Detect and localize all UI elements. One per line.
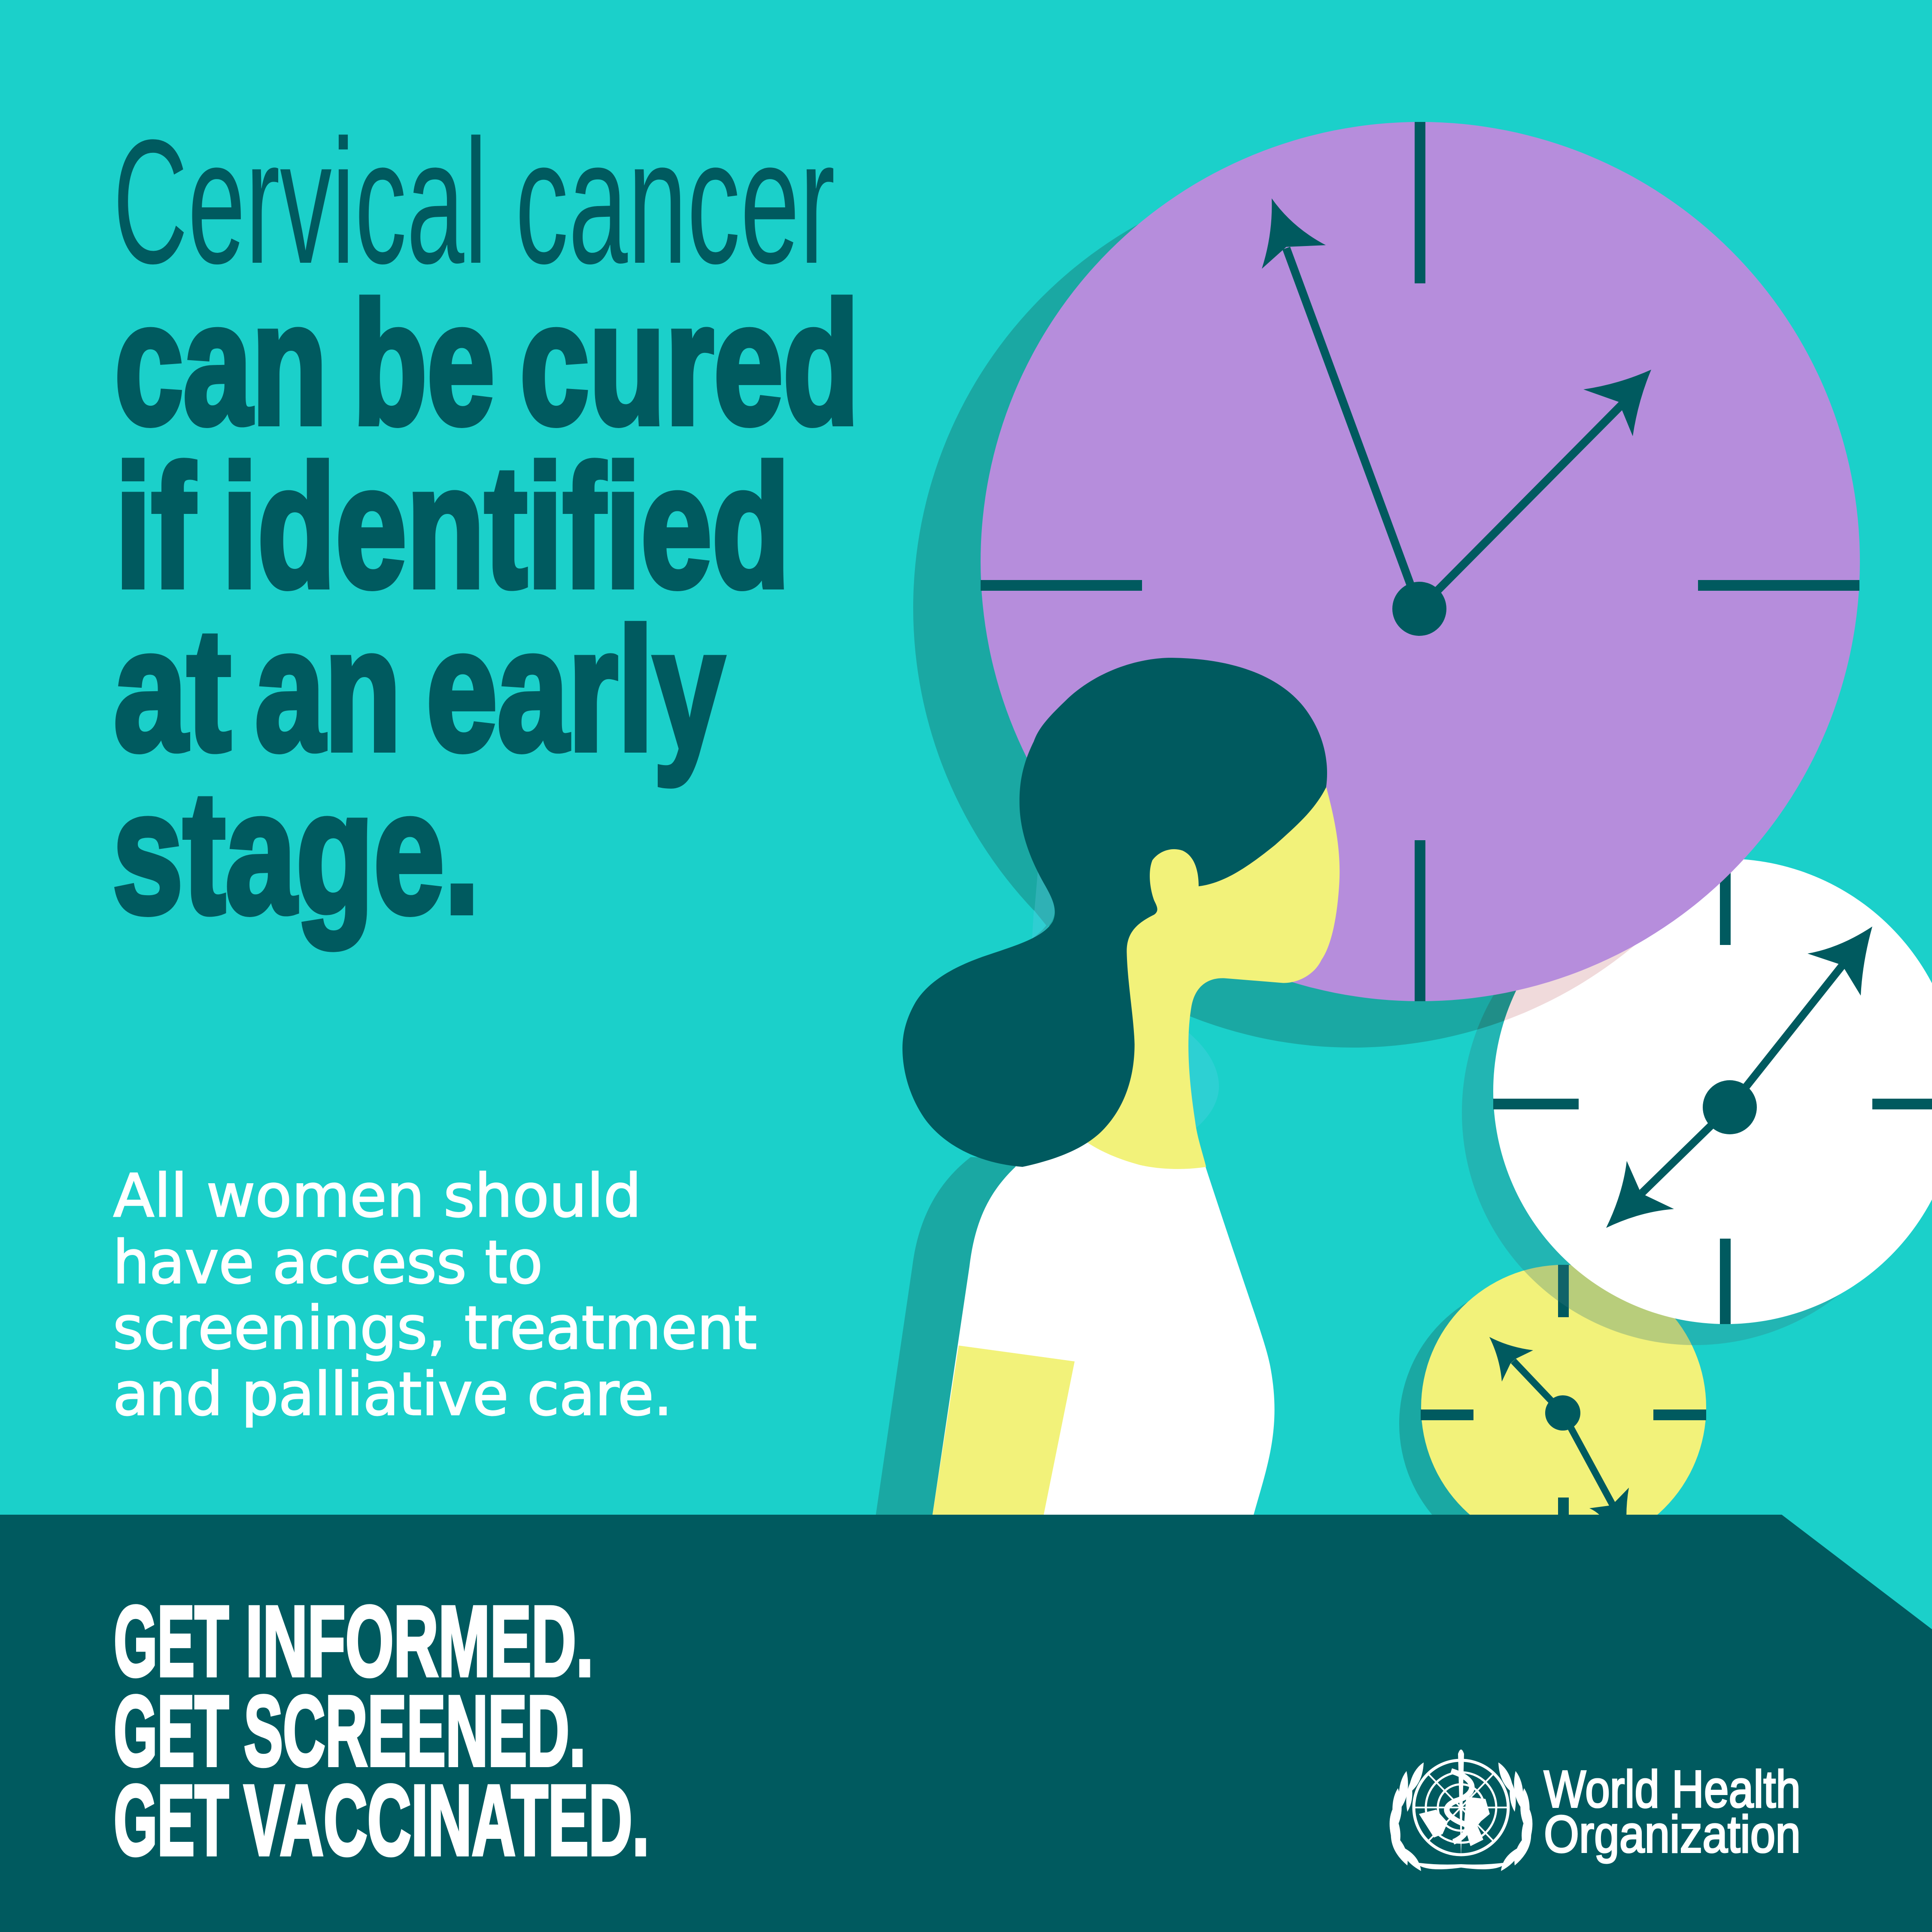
headline: stage.	[112, 755, 480, 950]
headline: early	[426, 592, 725, 787]
supporting text: and palliative care.	[113, 1360, 672, 1429]
call to action: GET	[114, 1586, 229, 1697]
headline: can	[115, 266, 327, 460]
call to action: GET	[114, 1675, 229, 1787]
WHO logo wordmark	[1544, 1760, 1801, 1863]
headline: cured	[520, 266, 859, 460]
headline: at	[114, 592, 231, 787]
headline	[112, 103, 859, 950]
call to action: INFORMED.	[246, 1586, 593, 1697]
call to action	[114, 1586, 649, 1876]
call to action: GET	[114, 1765, 229, 1876]
WHO logo wordmark: World Health	[1544, 1760, 1801, 1818]
supporting text: have access to	[113, 1228, 543, 1297]
headline: if	[115, 429, 196, 623]
headline: Cervical	[113, 103, 487, 301]
headline: be	[353, 266, 495, 460]
call to action: SCREENED.	[244, 1675, 586, 1787]
headline: identified	[222, 429, 790, 623]
white clock	[1462, 859, 1932, 1345]
supporting text: All women should	[113, 1161, 641, 1230]
large purple clock	[981, 122, 1860, 1001]
woman figure	[876, 658, 1340, 1515]
small yellow clock	[1399, 1265, 1706, 1566]
WHO logo wordmark: Organization	[1544, 1805, 1801, 1863]
supporting text	[113, 1161, 757, 1429]
WHO logo emblem	[1390, 1750, 1532, 1871]
headline: cancer	[515, 103, 835, 301]
purple clock shadow	[913, 168, 1792, 1048]
supporting text: screenings, treatment	[113, 1294, 757, 1363]
call to action: VACCINATED.	[244, 1765, 649, 1876]
bottom banner	[0, 1515, 1932, 1932]
headline: an	[255, 592, 401, 787]
